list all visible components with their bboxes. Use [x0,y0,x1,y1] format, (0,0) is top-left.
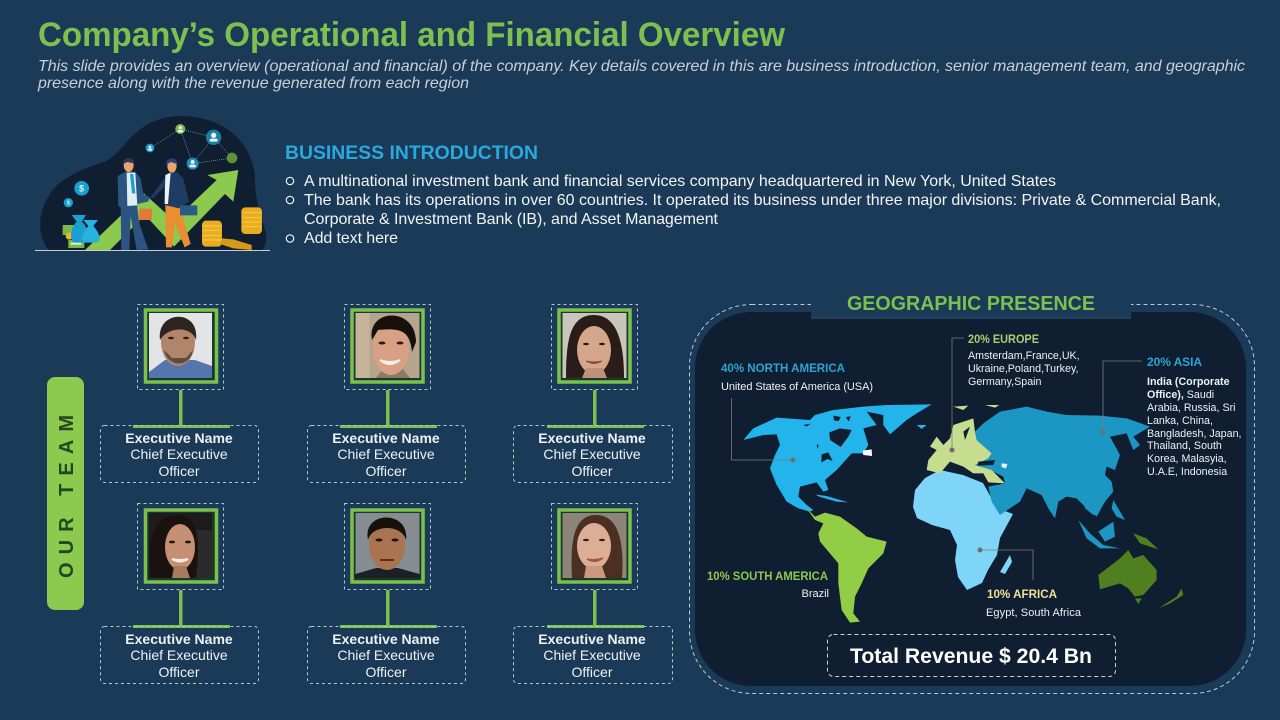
title: Company’s Operational and Financial Overview [38,16,786,54]
team member 4: Executive Name [125,631,233,647]
label: South America: 10% SOUTH AMERICA [707,569,828,583]
label: Africa: Egypt, South Africa [986,607,1082,619]
heading: geographic presence: GEOGRAPHIC PRESENCE [847,293,1095,315]
label: Europe: Amsterdam,France,UK, [968,350,1080,362]
icon: dollar coins: $ [79,184,85,194]
label: Europe: Germany,Spain [968,376,1042,388]
label: Asia: Lanka, China, [1147,415,1213,427]
team member 3: Officer [572,463,613,479]
label: North America: 40% NORTH AMERICA [721,361,845,375]
team member 2: Chief Executive [337,446,435,462]
leader lines [732,338,1142,580]
map: Africa [913,470,1013,590]
label: Europe: 20% EUROPE [968,334,1039,346]
icon: growth arrow [85,170,238,250]
label: Asia: Arabia, Russia, Sri [1147,402,1236,414]
team member 1: Executive Name [125,430,233,446]
photo: woman, brown hair [562,513,626,578]
label: Europe: Ukraine,Poland,Turkey, [968,363,1079,375]
illustration: business handshake and growth [35,116,270,251]
team member 4: Officer [159,664,200,680]
label: Asia: Bangladesh, Japan, [1147,428,1242,440]
photo: woman, long dark hair [562,313,626,378]
business introduction bullets: A multinational investment bank and financial services company headquartered in New York, United States [304,173,1056,190]
team member 3: Chief Executive [543,446,641,462]
label: South America [707,569,829,600]
subtitle: This slide provides an overview (operational and financial) of the company. Key details covered in this are business introduction, senior management team, and geographic [38,58,1245,75]
icon: second figure in orange trousers [139,158,197,247]
team member 1 [100,304,258,482]
team member 6 [514,504,672,684]
photo: woman, curly hair [149,513,212,578]
photo: man, black shirt [356,513,420,578]
team member 6: Executive Name [538,631,646,647]
label: South America: Brazil [801,588,829,600]
business introduction bullets: Add text here [304,230,398,247]
heading: business introduction: BUSINESS INTRODUCTION [285,142,538,164]
ground line [35,249,270,252]
label: Asia [1147,355,1242,478]
map: North America [743,404,932,512]
label: North America [721,361,873,393]
team member 4 [100,504,258,684]
icon: gold coin stacks [202,207,262,250]
label: Asia: 20% ASIA [1147,355,1202,369]
team member 1: Officer [159,463,200,479]
team member 2: Executive Name [332,430,440,446]
photo: man, blue shirt [149,313,212,378]
team member 5 [308,504,466,684]
business introduction bullets: The bank has its operations in over 60 countries. It operated its business under three major divisions: Private & Commercial Bank, [304,192,1221,209]
panel: our team label [47,377,84,610]
callout: total revenue: Total Revenue $ 20.4 Bn [850,645,1092,668]
team member 4: Chief Executive [130,647,228,663]
label: Africa [986,587,1082,619]
team member 6: Officer [572,664,613,680]
team member 3 [514,304,672,482]
map: Africa lower islands and Australasia [1098,533,1183,608]
map: South America [807,500,1183,623]
photo: young man [356,313,420,378]
team member 5: Executive Name [332,631,440,647]
map: Asia and Europe [927,405,1150,518]
label: Asia: Thailand, South [1147,440,1222,452]
callout: total revenue [828,634,1116,676]
subtitle: presence along with the revenue generated from each region [37,75,469,92]
world map [732,338,1183,623]
label: Africa: 10% AFRICA [987,587,1057,601]
team member 6: Chief Executive [543,647,641,663]
label: Asia: U.A.E, Indonesia [1147,466,1227,478]
team member 1: Chief Executive [130,446,228,462]
team member 3: Executive Name [538,430,646,446]
icon: dollar coins: $ [67,201,71,207]
label: Asia: Korea, Malasyia, [1147,453,1227,465]
label: Asia: India (Corporate [1147,376,1230,388]
business introduction bullets [286,173,1221,247]
team member 5: Chief Executive [337,647,435,663]
icon: money bags [63,215,100,248]
icon: dollar coins [64,181,89,207]
icon: man in dark suit [118,158,150,250]
panel: our team label: OUR TEAM [56,415,78,578]
subtitle [37,58,1245,92]
label: North America: United States of America (USA) [721,381,873,393]
panel: geographic presence [690,285,1254,694]
icon: network [146,124,237,170]
label: Europe [968,334,1080,388]
business introduction bullets: Corporate & Investment Bank (IB), and Asset Management [304,211,719,228]
team member 5: Officer [366,664,407,680]
team member 2: Officer [366,463,407,479]
team member 2 [308,304,466,482]
label: Asia: Office), Saudi [1147,389,1214,401]
